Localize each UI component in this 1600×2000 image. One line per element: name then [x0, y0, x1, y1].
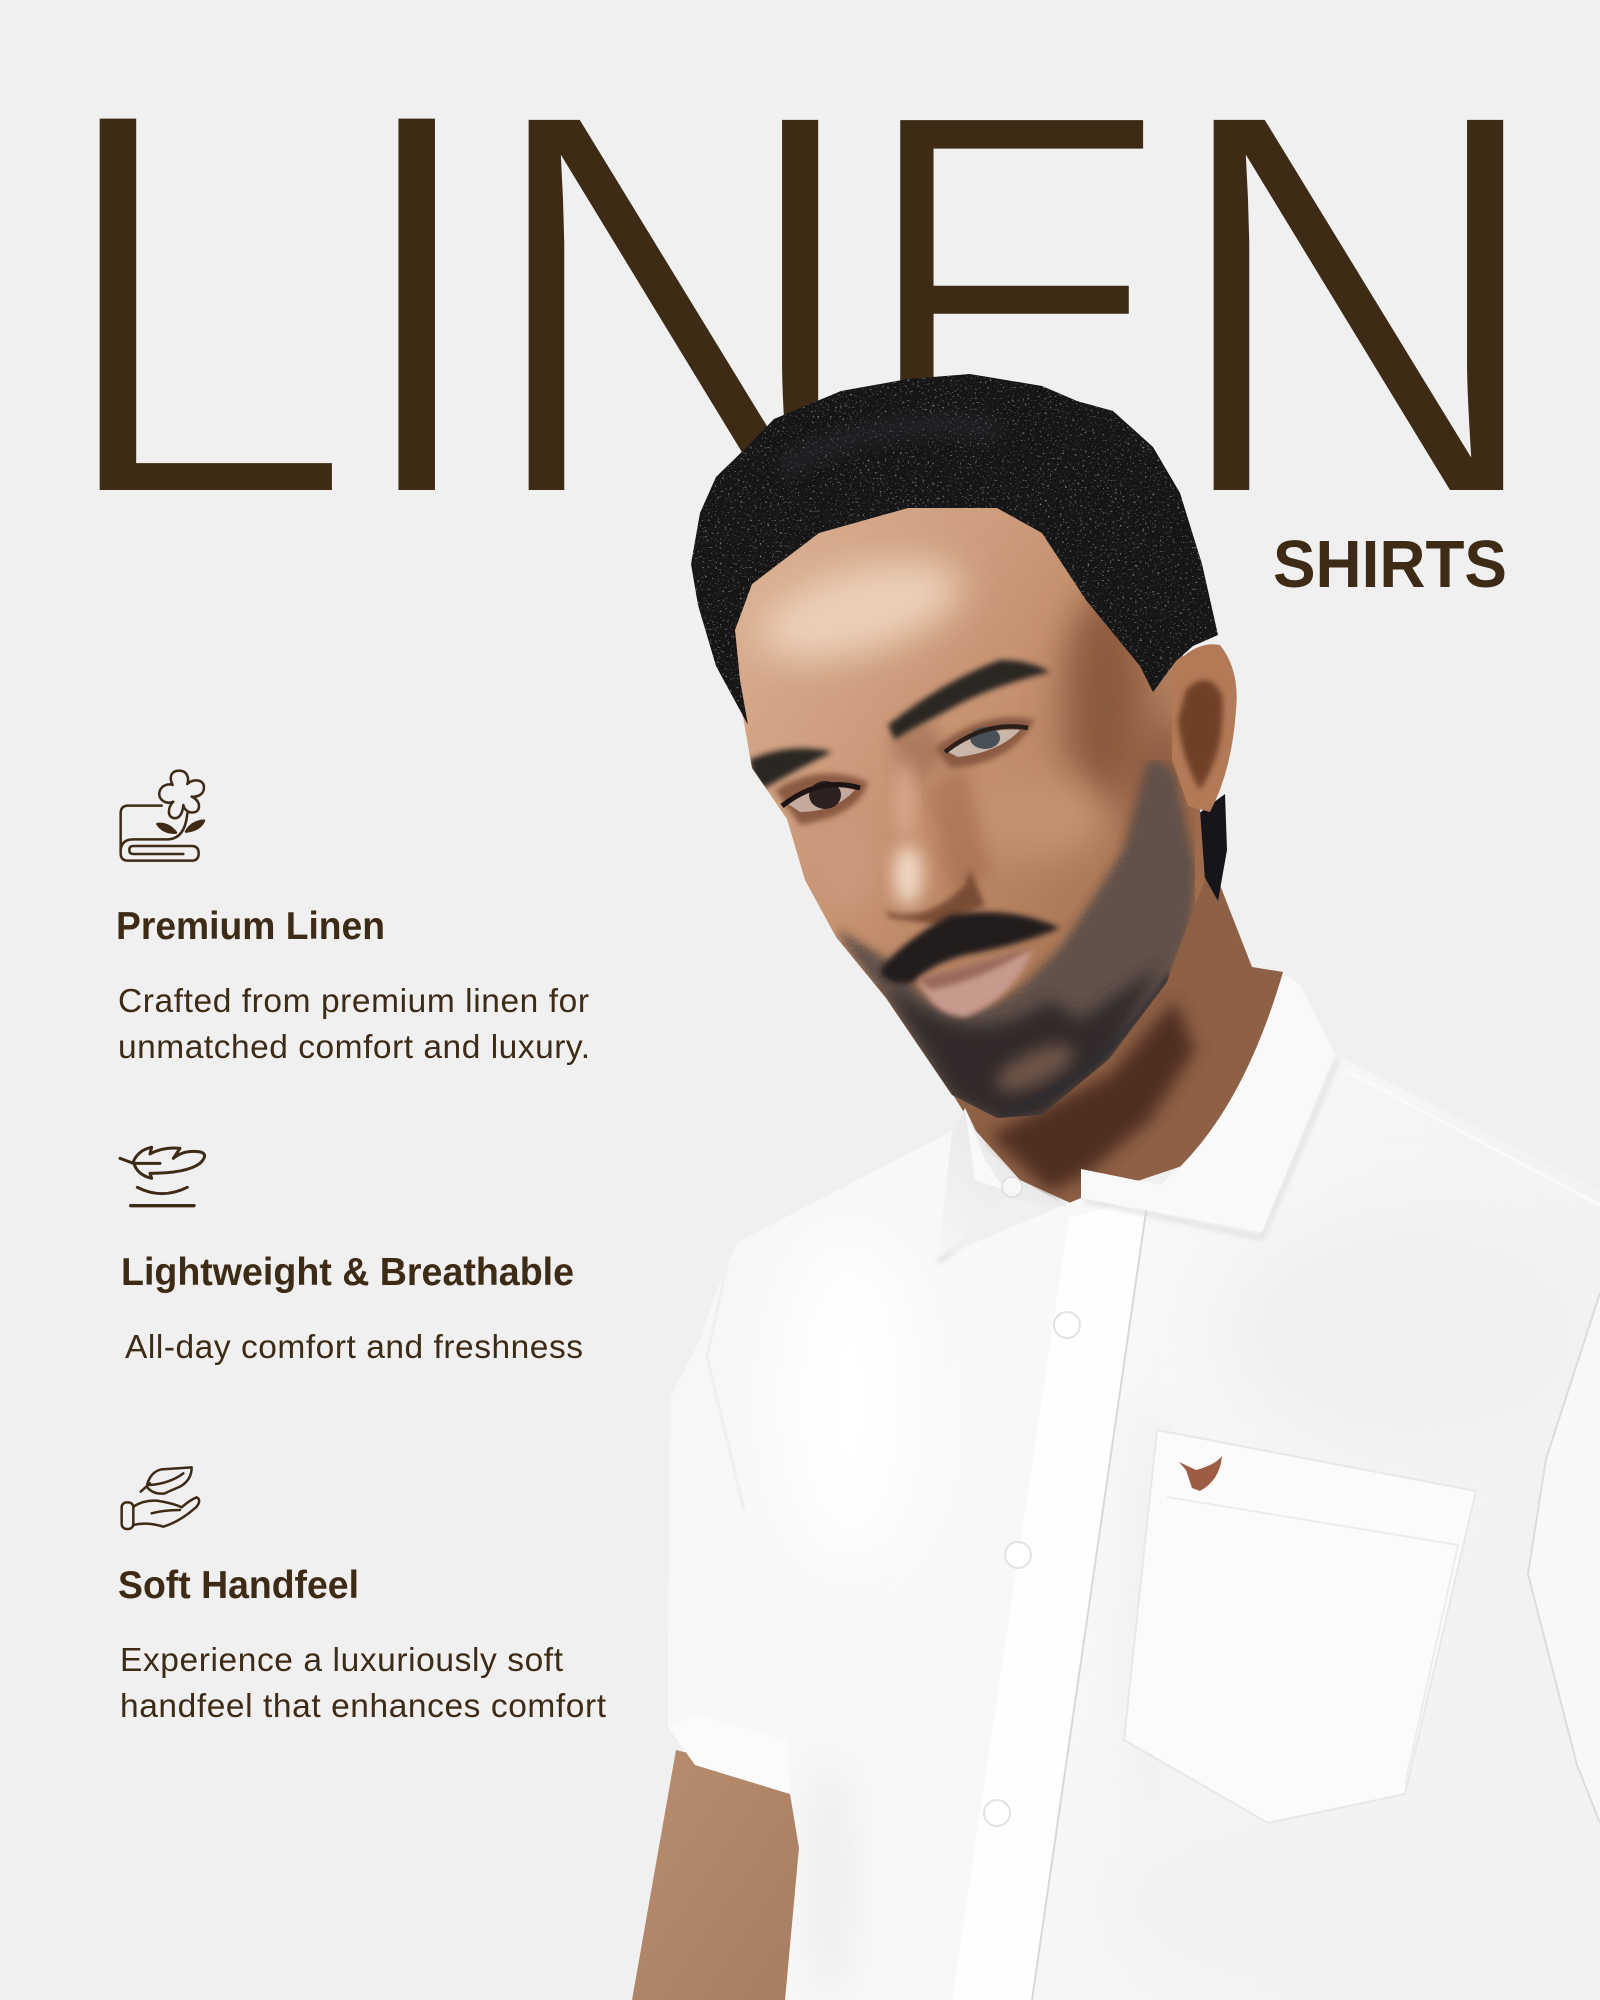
- arm: [632, 1750, 800, 2000]
- description: All-day comfort and freshness: [125, 1329, 583, 1366]
- pocket: [1124, 1430, 1476, 1823]
- lips: [920, 950, 1033, 1017]
- title: LINEN: N: [480, 0, 866, 611]
- back hair below ear: [1195, 794, 1227, 901]
- left eyebrow: [749, 748, 832, 788]
- hair: [691, 374, 1218, 725]
- ear: [1172, 644, 1237, 812]
- icon: towel with flower: [121, 771, 204, 861]
- title: LINEN: [46, 0, 1551, 618]
- feature: Lightweight and Breathable: [120, 1147, 583, 1366]
- right sleeve: [1528, 1293, 1600, 1823]
- shirt: [668, 1054, 1600, 2000]
- title: LINEN: I: [338, 0, 495, 618]
- description line 1: Experience a luxuriously soft: [120, 1642, 564, 1679]
- description line 2: unmatched comfort and luxury.: [118, 1029, 590, 1066]
- icon: hand with leaf: [122, 1467, 199, 1529]
- right eye: [935, 717, 1035, 768]
- placket: [1033, 1818, 1057, 1945]
- title: LINEN: E: [854, 0, 1180, 616]
- left eye: [775, 774, 868, 825]
- right eyebrow: [888, 660, 1050, 740]
- title: LINEN: L: [46, 0, 359, 618]
- logo: [1179, 1456, 1222, 1491]
- heading: Soft Handfeel: [118, 1564, 359, 1607]
- collar shadow: [1085, 1058, 1338, 1238]
- face: [725, 490, 1205, 1122]
- shoulder seam: [1345, 1070, 1600, 1205]
- feature: Soft Handfeel: [118, 1467, 607, 1725]
- heading: Lightweight & Breathable: [121, 1251, 574, 1294]
- beard stubble: [836, 760, 1195, 1122]
- title: LINEN: N: [1166, 0, 1551, 611]
- feature: Premium Linen: [116, 771, 590, 1066]
- moustache: [881, 912, 1060, 984]
- heading: Premium Linen: [116, 905, 385, 948]
- buttons: [984, 1312, 1080, 1826]
- subtitle: SHIRTS: SHIRTS: [1273, 527, 1507, 602]
- icon: feather: [120, 1147, 205, 1206]
- model wearing white linen shirt: [632, 374, 1600, 2000]
- description line 2: handfeel that enhances comfort: [120, 1688, 607, 1725]
- collar: [938, 972, 1335, 1258]
- neck: [950, 780, 1283, 1205]
- description line 1: Crafted from premium linen for: [118, 983, 589, 1020]
- sleeve cuff: [686, 1752, 790, 1794]
